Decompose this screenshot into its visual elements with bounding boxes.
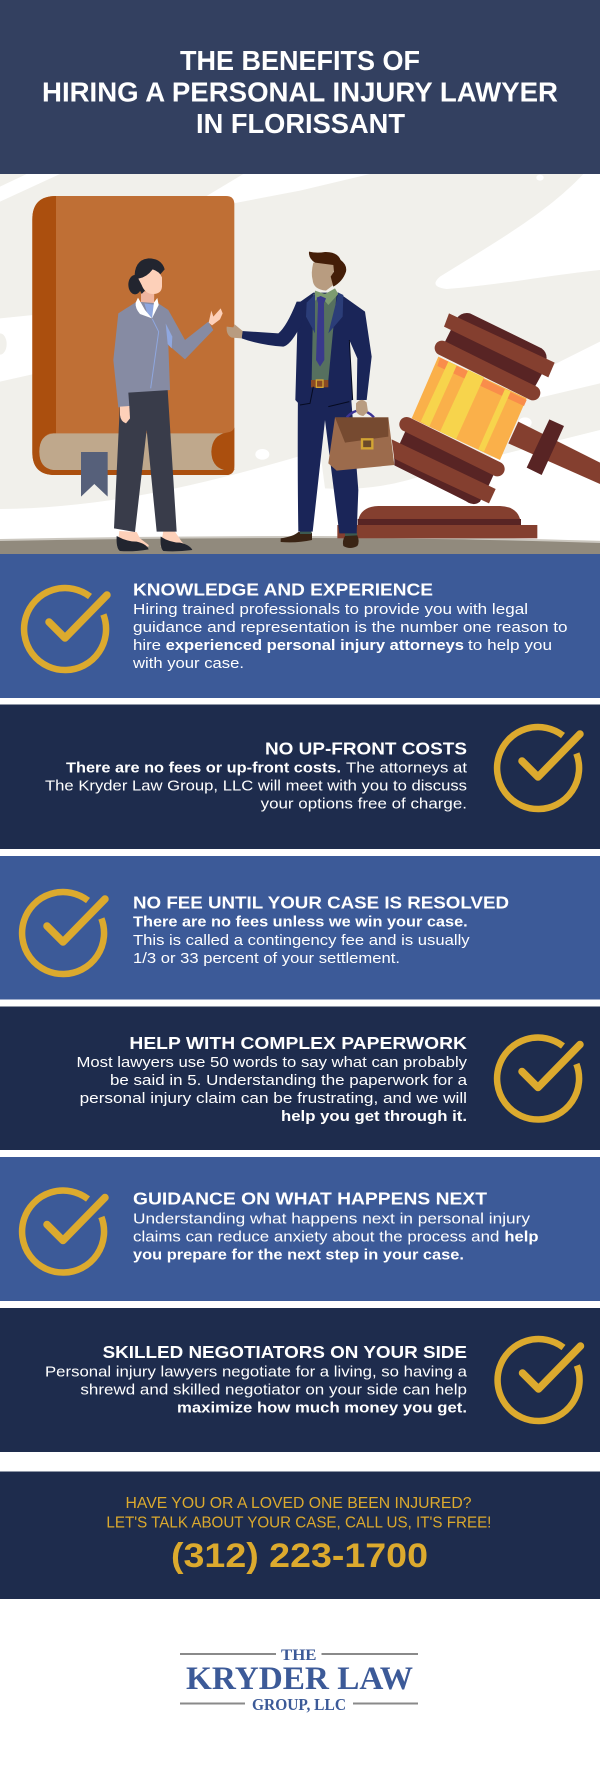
body text: shrewd and skilled negotiator on your side can help [80, 1382, 467, 1399]
body text [45, 760, 468, 813]
body text: hire [133, 637, 161, 654]
body text: 1/3 or 33 percent of your settlement. [133, 950, 400, 967]
body text: Personal injury lawyers negotiate for a living, so having a [45, 1364, 468, 1381]
call to action text [106, 1495, 491, 1531]
heading: NO UP-FRONT COSTS [265, 739, 467, 759]
panel: call to action [0, 1472, 600, 1599]
woman [113, 258, 223, 551]
body text: claims can reduce anxiety about the process and [133, 1228, 499, 1245]
body text: help [504, 1228, 538, 1245]
body text: There are no fees or up-front costs. [66, 760, 341, 777]
logo: The Kryder Law Group, LLC: THE [281, 1647, 316, 1664]
body text: The attorneys at [346, 760, 468, 777]
gavel [337, 313, 600, 538]
body text [76, 1054, 468, 1125]
body text: be said in 5. Understanding the paperwork for a [110, 1072, 468, 1089]
title: HIRING A PERSONAL INJURY LAWYER [42, 76, 558, 108]
title banner [0, 0, 600, 174]
body text: with your case. [132, 655, 244, 672]
illustration: lawyer meeting client with book and gavel [0, 174, 600, 554]
heading: SKILLED NEGOTIATORS ON YOUR SIDE [103, 1342, 467, 1362]
panel: help with complex paperwork [0, 1006, 600, 1150]
heading: NO FEE UNTIL YOUR CASE IS RESOLVED [133, 893, 509, 913]
panel: guidance on what happens next [0, 1157, 600, 1301]
body text: experienced personal injury attorneys [166, 637, 464, 654]
body text: to help you [468, 637, 552, 654]
bookmark [81, 452, 108, 497]
icon: check mark [24, 588, 107, 670]
man with briefcase [227, 252, 394, 548]
panel: no up-front costs [0, 704, 600, 849]
body text: personal injury claim can be frustrating, and we will [80, 1090, 467, 1107]
icon: check mark [22, 1191, 105, 1273]
body text [45, 1364, 468, 1417]
title: IN FLORISSANT [196, 108, 405, 139]
logo: The Kryder Law Group, LLC: KRYDER LAW [186, 1661, 413, 1697]
icon: check mark [497, 727, 580, 809]
logo: The Kryder Law Group, LLC: GROUP, LLC [252, 1695, 346, 1714]
body text: your options free of charge. [261, 796, 467, 813]
body text: Most lawyers use 50 words to say what can probably [76, 1054, 468, 1071]
call to action text: HAVE YOU OR A LOVED ONE BEEN INJURED? [126, 1495, 472, 1512]
icon: check mark [498, 1339, 580, 1421]
phone number: (312) 223-1700 [171, 1537, 428, 1575]
background swooshes [0, 174, 600, 541]
title [42, 45, 558, 139]
heading: KNOWLEDGE AND EXPERIENCE [133, 580, 433, 600]
title: THE BENEFITS OF [180, 45, 420, 76]
body text: help you get through it. [281, 1108, 467, 1125]
body text: This is called a contingency fee and is usually [133, 932, 470, 949]
book [32, 196, 234, 497]
panel: skilled negotiators on your side [0, 1308, 600, 1452]
panel: knowledge and experience [0, 554, 600, 698]
logo: The Kryder Law Group, LLC [180, 1647, 418, 1714]
gavel block [358, 506, 521, 525]
gavel handle [508, 422, 600, 484]
body text: guidance and representation is the number one reason to [133, 619, 568, 636]
icon: check mark [497, 1038, 580, 1120]
body text [133, 914, 470, 967]
call to action text: LET'S TALK ABOUT YOUR CASE, CALL US, IT'S FREE! [106, 1514, 491, 1531]
icon: check mark [22, 892, 105, 974]
body text: maximize how much money you get. [177, 1400, 467, 1417]
body text: you prepare for the next step in your case. [133, 1246, 464, 1263]
heading: HELP WITH COMPLEX PAPERWORK [129, 1033, 467, 1053]
body text [132, 601, 568, 672]
body text: Hiring trained professionals to provide you with legal [133, 601, 528, 618]
body text: There are no fees unless we win your case. [133, 914, 468, 931]
panel: no fee until case is resolved [0, 856, 600, 1000]
ground [0, 536, 600, 554]
heading: GUIDANCE ON WHAT HAPPENS NEXT [133, 1189, 487, 1209]
body text: The Kryder Law Group, LLC will meet with you to discuss [45, 778, 467, 795]
gavel head [412, 357, 527, 460]
body text: Understanding what happens next in personal injury [133, 1210, 531, 1227]
body text [133, 1210, 538, 1263]
